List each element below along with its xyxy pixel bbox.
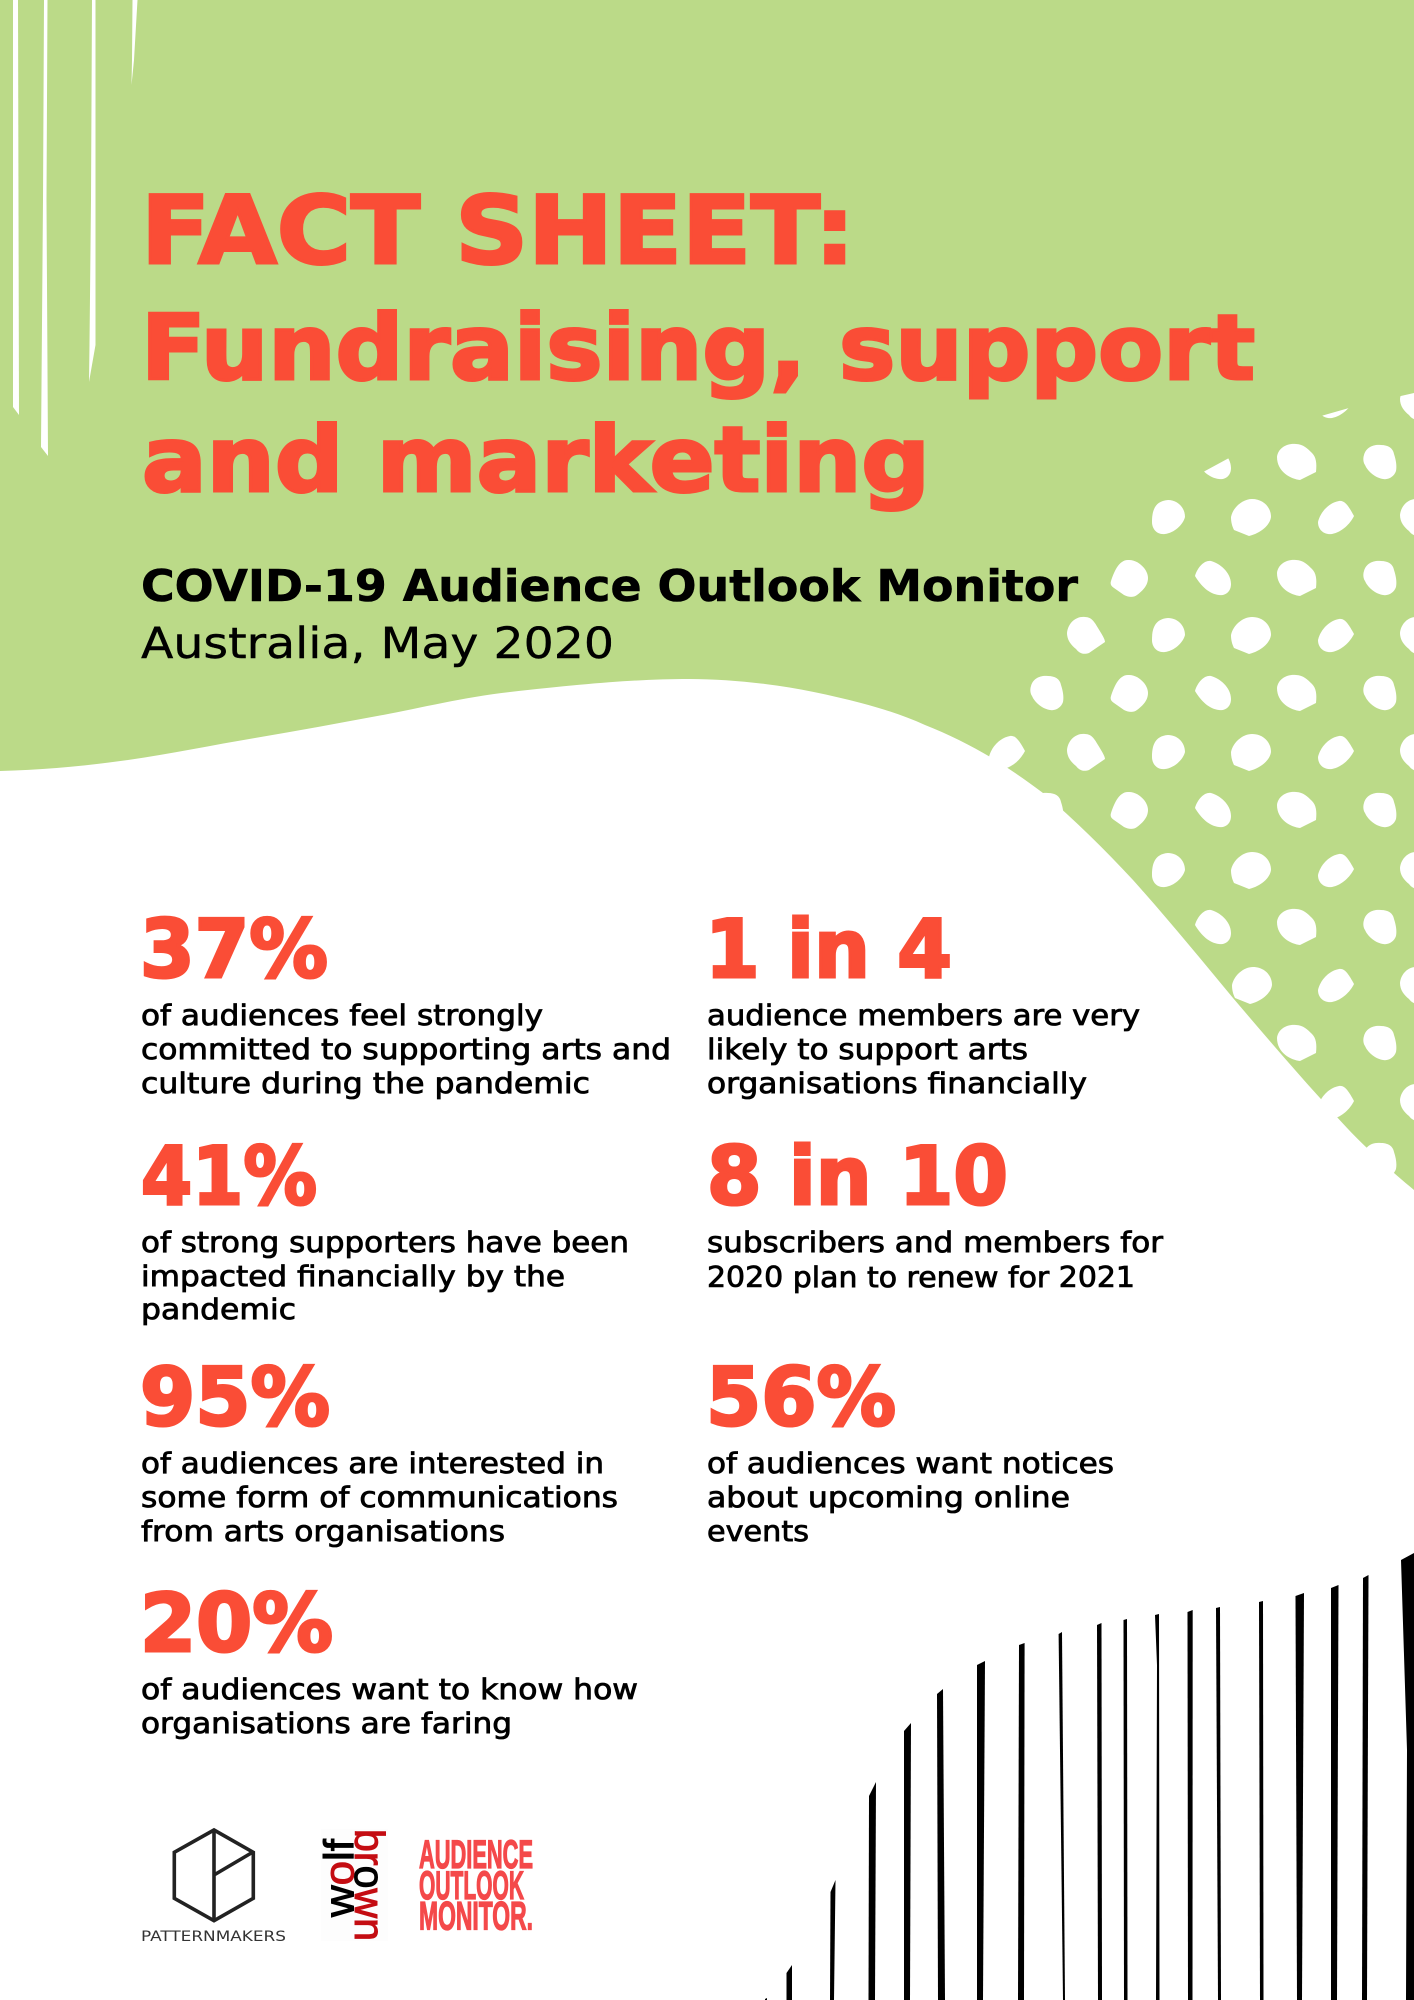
stat: 95%: from arts organisations	[141, 1515, 505, 1548]
green header wave	[0, 0, 1414, 1190]
stat: 8 in 10: 8 in 10	[707, 1130, 1008, 1223]
stat: 56%	[706, 1351, 1114, 1548]
stat: 56%: about upcoming online	[707, 1481, 1070, 1514]
stat: 1 in 4: 1 in 4	[705, 903, 952, 996]
logo: wolf brown: br o wn	[346, 1829, 393, 1941]
logo: Audience Outlook Monitor: AUDIENCE	[419, 1833, 533, 1877]
title: FACT SHEET:	[141, 177, 855, 286]
stat: 95%	[140, 1351, 618, 1548]
stat: 41%: of strong supporters have been	[141, 1226, 629, 1259]
stat: 8 in 10: subscribers and members for	[707, 1226, 1163, 1259]
stat: 37%: of audiences feel strongly	[141, 999, 543, 1032]
title	[141, 177, 1255, 513]
stat: 95%: 95%	[140, 1351, 330, 1444]
stat: 8 in 10	[707, 1130, 1163, 1294]
subtitle: Australia, May 2020	[141, 619, 614, 669]
subtitle	[141, 561, 1078, 669]
stat: 1 in 4: audience members are very	[707, 999, 1140, 1032]
logo: Audience Outlook Monitor: OUTLOOK	[419, 1864, 524, 1908]
logo: Audience Outlook Monitor	[419, 1833, 533, 1938]
stat: 41%	[141, 1130, 629, 1326]
stat: 37%: 37%	[140, 903, 328, 996]
logo: wolf brown: wolf	[316, 1839, 362, 1918]
white dot pattern	[989, 383, 1414, 1177]
stat: 56%: of audiences want notices	[707, 1447, 1114, 1480]
black vertical stripes bottom right	[765, 1553, 1414, 2000]
stat: 41%: pandemic	[141, 1293, 296, 1326]
logo: Patternmakers	[141, 1830, 286, 1945]
title: and marketing	[142, 408, 930, 513]
stat: 56%: events	[707, 1515, 809, 1548]
title: Fundraising, support	[141, 296, 1255, 401]
stat: 1 in 4: likely to support arts	[707, 1033, 1028, 1066]
stat: 37%: culture during the pandemic	[141, 1067, 590, 1100]
logo: Patternmakers: PATTERNMAKERS	[141, 1929, 286, 1945]
stat: 56%: 56%	[706, 1351, 896, 1444]
logo: wolf brown	[316, 1829, 393, 1941]
stat: 1 in 4	[705, 903, 1140, 1100]
logo: Audience Outlook Monitor: MONITOR.	[419, 1894, 533, 1938]
stat: 20%: of audiences want to know how	[141, 1673, 638, 1706]
stat: 95%: some form of communications	[141, 1481, 618, 1514]
stat: 37%	[140, 903, 671, 1100]
stat: 20%: 20%	[140, 1577, 333, 1670]
subtitle: COVID-19 Audience Outlook Monitor	[141, 561, 1078, 612]
stat: 20%: organisations are faring	[141, 1707, 512, 1740]
stat: 41%: 41%	[141, 1130, 317, 1223]
white brush lines top left	[13, 0, 138, 456]
stat: 1 in 4: organisations financially	[707, 1067, 1087, 1100]
stat: 20%	[140, 1577, 638, 1740]
stat: 37%: committed to supporting arts and	[141, 1033, 671, 1066]
stat: 41%: impacted financially by the	[141, 1260, 565, 1293]
stat: 8 in 10: 2020 plan to renew for 2021	[707, 1261, 1135, 1294]
stat: 95%: of audiences are interested in	[141, 1447, 604, 1480]
